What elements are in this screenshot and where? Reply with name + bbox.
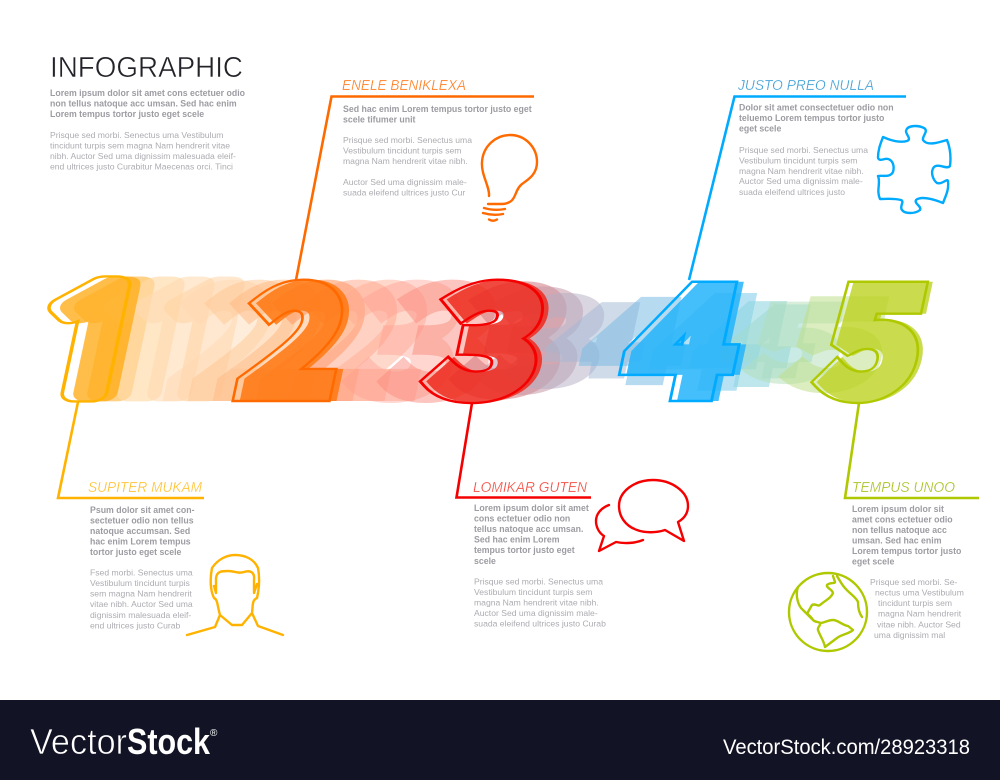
- body text blue panel: Prisque sed morbi. Senectus uma: [739, 145, 868, 155]
- body text blue panel: eget scele: [739, 124, 781, 134]
- title: INFOGRAPHIC: [50, 52, 243, 84]
- body text red panel: [474, 503, 606, 628]
- numeral 2: [231, 278, 350, 402]
- footer logo: Stock: [127, 721, 211, 762]
- ghost numerals band: 1: [93, 271, 257, 416]
- panel: lomikar guten: [456, 403, 688, 628]
- heading orange: ENELE BENIKLEXA: [342, 78, 466, 94]
- body text green panel: umsan. Sed hac enim: [852, 536, 942, 546]
- body text red panel: Prisque sed morbi. Senectus uma: [474, 576, 603, 586]
- body text red panel: scele: [474, 556, 496, 566]
- body text green panel: vitae nibh. Auctor Sed: [877, 620, 961, 630]
- body text amber panel: vitae nibh. Auctor Sed uma: [90, 599, 193, 609]
- ghost numerals band: 3: [371, 224, 519, 436]
- ghost numerals band: 2: [311, 225, 452, 437]
- panel: supiter mukam: [58, 402, 283, 635]
- numeral 2: 2: [233, 225, 374, 437]
- ghost numerals band: 2: [181, 225, 322, 437]
- footer logo: [30, 721, 211, 762]
- ghost numerals band: 4: [714, 270, 828, 401]
- body text green panel: Lorem ipsum dolor sit: [852, 504, 944, 514]
- body text blue panel: Auctor Sed uma dignissim male-: [739, 176, 863, 186]
- body text red panel: Vestibulum tincidunt turpis sem: [474, 587, 592, 597]
- icon: light bulb: [482, 135, 537, 221]
- body text blue panel: magna Nam hendrerit vitae nibh.: [739, 166, 864, 176]
- numeral 1: [47, 275, 140, 403]
- ghost numerals band: 5: [739, 263, 860, 407]
- body text green panel: uma dignissim mal: [874, 630, 945, 640]
- footer url: VectorStock.com/28923318: [723, 736, 970, 759]
- ghost numerals band: 3: [470, 239, 604, 425]
- body text red panel: Auctor Sed uma dignissim male-: [474, 608, 598, 618]
- ghost numerals band: 4: [539, 266, 658, 401]
- footer bar: [0, 700, 1000, 780]
- ghost numerals band: 3: [443, 229, 590, 432]
- body text orange panel: magna Nam hendrerit vitae nibh.: [343, 156, 468, 166]
- intro text block: Lorem tempus tortor justo eget scele: [50, 109, 204, 119]
- numeral 4: [618, 280, 746, 402]
- icon: person head: [187, 555, 283, 635]
- intro text block: [50, 88, 245, 172]
- icon: puzzle piece: [878, 126, 951, 213]
- body text green panel: tincidunt turpis sem: [878, 598, 952, 608]
- body text orange panel: scele tifumer unit: [343, 114, 416, 124]
- numeral 1: 1: [19, 271, 183, 416]
- ghost numerals band: 4: [643, 247, 778, 420]
- ghost numerals band: 3: [336, 224, 484, 436]
- icon: globe: [789, 573, 867, 651]
- body text blue panel: [739, 102, 894, 197]
- ghost numerals band: 2: [206, 225, 347, 437]
- icon: speech bubbles: [596, 480, 688, 551]
- ghost numerals band: 3: [498, 251, 623, 415]
- numeral 5: 5: [811, 224, 952, 436]
- panel: justo preo nulla: [689, 78, 951, 280]
- body text orange panel: suada eleifend ultrices justo Cur: [343, 188, 465, 198]
- heading red: LOMIKAR GUTEN: [473, 480, 587, 496]
- leader line green: [845, 403, 979, 498]
- body text blue panel: Dolor sit amet consectetuer odio non: [739, 102, 894, 112]
- footer logo: Vector: [30, 721, 127, 762]
- numeral 4: 4: [618, 225, 768, 437]
- body text green panel: Lorem tempus tortor justo: [852, 546, 961, 556]
- body text red panel: Sed hac enim Lorem: [474, 534, 560, 544]
- ghost numerals band: 1: [33, 271, 197, 416]
- heading green: TEMPUS UNOO: [852, 480, 955, 496]
- leader line blue: [689, 96, 906, 280]
- ghost numerals band: 1: [123, 271, 287, 416]
- body text orange panel: Vestibulum tincidunt turpis sem: [343, 146, 461, 156]
- body text orange panel: Auctor Sed uma dignissim male-: [343, 177, 467, 187]
- body text red panel: suada eleifend ultrices justo Curab: [474, 618, 606, 628]
- ghost numerals band: 5: [775, 251, 906, 420]
- body text amber panel: hac enim Lorem tempus: [90, 536, 191, 546]
- body text amber panel: end ultrices justo Curab: [90, 620, 181, 630]
- leader line amber: [58, 402, 204, 498]
- body text amber panel: dignissim malesuada eleif-: [90, 610, 191, 620]
- numeral 3: [418, 278, 549, 404]
- body text red panel: tempus tortor justo eget: [474, 545, 575, 555]
- ghost numerals band: 4: [683, 261, 806, 413]
- body text orange panel: Prisque sed morbi. Senectus uma: [343, 135, 472, 145]
- leader line red: [456, 403, 591, 498]
- body text green panel: eget scele: [852, 556, 894, 566]
- body text red panel: magna Nam hendrerit vitae nibh.: [474, 598, 599, 608]
- ghost numerals band: 4: [573, 255, 701, 411]
- intro text block: Prisque sed morbi. Senectus uma Vestibulum: [50, 130, 223, 140]
- body text green panel: Prisque sed morbi. Se-: [870, 577, 958, 587]
- ghost numerals band: 2: [249, 225, 390, 437]
- body text red panel: tellus natoque acc umsan.: [474, 524, 583, 534]
- body text amber panel: Vestibulum tincidunt turpis: [90, 578, 190, 588]
- body text amber panel: sem magna Nam hendrerit: [90, 588, 192, 598]
- intro text block: end ultrices justo Curabitur Maecenas orci. Tinci: [50, 162, 233, 172]
- ghost numerals band: 1: [63, 271, 227, 416]
- body text amber panel: [90, 505, 195, 630]
- panel: tempus unoo: [789, 403, 979, 651]
- ghost numerals band: 2: [156, 225, 297, 437]
- body text red panel: Lorem ipsum dolor sit amet: [474, 503, 589, 513]
- body text blue panel: suada eleifend ultrices justo: [739, 187, 845, 197]
- body text amber panel: Psum dolor sit amet con-: [90, 505, 195, 515]
- intro text block: tincidunt turpis sem magna Nam hendrerit vitae: [50, 140, 230, 150]
- body text orange panel: [343, 104, 532, 198]
- heading amber: SUPITER MUKAM: [88, 480, 203, 496]
- intro text block: non tellus natoque acc umsan. Sed hac enim: [50, 98, 237, 108]
- body text amber panel: Fsed morbi. Senectus uma: [90, 568, 193, 578]
- ghost numerals band: 2: [281, 225, 422, 437]
- panel: enele beniklexa: [296, 78, 537, 280]
- body text amber panel: tortor justo eget scele: [90, 547, 182, 557]
- body text green panel: [852, 504, 964, 640]
- body text green panel: amet cons ectetuer odio: [852, 514, 953, 524]
- intro text block: nibh. Auctor Sed uma dignissim malesuada eleif-: [50, 151, 236, 161]
- body text amber panel: sectetuer odio non tellus: [90, 516, 194, 526]
- body text blue panel: teluemo Lorem tempus tortor justo: [739, 113, 884, 123]
- body text green panel: nectus uma Vestibulum: [875, 588, 964, 598]
- heading blue: JUSTO PREO NULLA: [737, 78, 874, 94]
- body text green panel: magna Nam hendrerit: [878, 608, 962, 618]
- body text orange panel: Sed hac enim Lorem tempus tortor justo eget: [343, 104, 532, 114]
- leader line orange: [296, 96, 534, 280]
- body text amber panel: natoque accumsan. Sed: [90, 526, 190, 536]
- body text blue panel: Vestibulum tincidunt turpis sem: [739, 156, 857, 166]
- body text red panel: cons ectetuer odio non: [474, 514, 570, 524]
- numeral 5: [810, 280, 933, 404]
- registered mark: ®: [210, 728, 218, 739]
- intro text block: Lorem ipsum dolor sit amet cons ectetuer odio: [50, 88, 245, 98]
- numeral 3: 3: [421, 225, 573, 436]
- body text green panel: non tellus natoque acc: [852, 525, 947, 535]
- ghost numerals band: [33, 224, 906, 437]
